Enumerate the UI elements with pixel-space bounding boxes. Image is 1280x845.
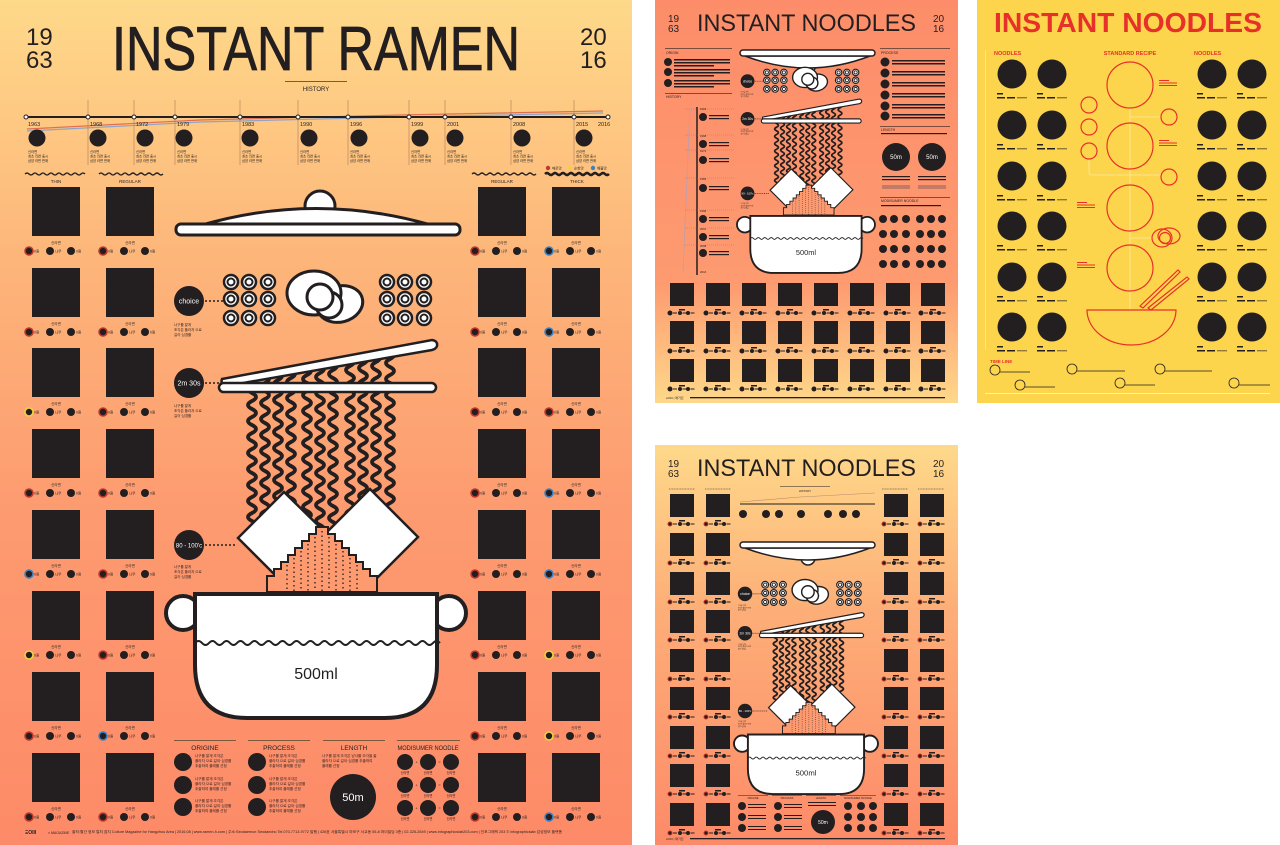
section: process: PROCESS [263,745,296,752]
icon: pot with water [166,594,466,718]
section: modisumer noodle: = [438,806,441,810]
step label: choice: 나구를 알게 [174,322,191,327]
yellow timeline [985,359,1270,394]
history timeline: 삼양 라면 판매 [447,158,467,163]
legend: 매운맛 [552,166,562,170]
icon: egg [287,271,367,327]
footer: 출처:월간 정보 컬처 잡지 Culture Magazine for Hangzhou Area | 2016.08 | www.ramen-h.com | 주소:Seodaemun Seodaecho Tel.070-7713-9772 발행 | 426호 서울특별시 마포구 서교동 55-8 마이빌딩 3층 | 02-325-2649 | www.infographicslab203.com | 인포그래픽 203 © infographicslab 감성정보 플랫폼 [72,829,563,834]
section: process: 추출하여 플레를 선정 [269,763,301,768]
column labels: thin / regular / regular / thick: REGULAR [119,179,142,184]
history timeline: 최초 라면 출시 [513,154,533,158]
yellow column headings: STANDARD RECIPE [1104,51,1157,57]
panel: thumbnail poster 3 (gradient) [655,445,958,845]
footer: ΞOIII [25,830,37,836]
history timeline: 1996 [350,122,362,128]
year end [580,24,607,74]
thumb title: 19 [668,14,680,25]
history timeline: 신라면 [242,149,251,154]
history timeline: 신라면 [300,149,309,154]
panel: thumbnail poster 1 (orange): 50m [926,155,938,161]
thumb3 title: 16 [933,469,945,480]
history timeline: 신라면 [90,149,99,154]
step label: 2m 30s: 조각은 플라자 으로 [174,408,202,413]
icon: chopsticks [219,340,437,392]
column labels: thin / regular / regular / thick [25,173,609,184]
step label: choice [174,286,223,337]
year end: 16 [580,47,607,74]
thumb footer: ΞOIII | 매거진 [666,395,684,400]
step label: 2m 30s: 2m 30s [178,380,201,388]
year start: 63 [26,47,53,74]
column labels: thin / regular / regular / thick: REGULAR [491,179,514,184]
section: process: 플라자 으로 길이·심경를 [269,781,306,786]
icon: pot lid [176,191,460,235]
section: modisumer noodle: + [415,760,418,764]
thumb3 title: 20 [933,459,945,470]
thumb3 column headers [669,488,944,490]
section: origine: 플라자 으로 길이·심경를 [195,803,232,808]
section: modisumer noodle: = [438,760,441,764]
icon grid: toppings right [380,275,431,325]
section: process: 추출하여 플레를 선정 [269,786,301,791]
history timeline: 1999 [411,122,423,128]
thumb3 bottom sections: ΞOIII | 매거진 [666,836,684,841]
history timeline: 1972 [136,122,148,128]
thumb3 lid [740,542,875,565]
section: origine: 플라자 으로 길이·심경를 [195,781,232,786]
section: modisumer noodle: = [438,782,441,788]
history timeline: 2015 [576,122,588,128]
step label: 80-100c [174,530,237,579]
history timeline: 삼양 라면 판매 [136,158,156,163]
thumb vertical timeline: 2001 [700,227,707,231]
thumb3 title: INSTANT NOODLES [697,455,916,482]
title: INSTANT RAMEN [112,15,520,84]
history timeline: 삼양 라면 판매 [576,158,596,163]
step label: choice: 길이·심경를 [174,332,192,337]
thumb vertical timeline: 1968 [700,134,707,138]
thumb3 bottom sections: PROCESS [781,796,794,800]
column labels: thin / regular / regular / thick: THIN [51,179,61,184]
history timeline: 신라면 [350,149,359,154]
history timeline: 2016 [598,122,610,128]
thumb title: 20 [933,14,945,25]
step label: 2m 30s: 길이·심경를 [174,413,192,418]
section: origine: 추출하여 플레를 선정 [195,808,227,813]
panel: main poster [0,0,632,845]
history timeline: 삼양 라면 판매 [513,158,533,163]
icon: pot with water: 500ml [294,666,338,683]
thumb3 history [739,486,875,518]
yellow timeline: TIME LINE [990,359,1012,364]
section: process: 나구를 알게 조각은 [269,753,298,758]
section: modisumer noodle: 신라면 [447,770,455,775]
section: origine: 나구를 알게 조각은 [195,798,224,803]
panel: thumbnail poster 3 (gradient): 50m [818,820,828,826]
history timeline: 최초 라면 출시 [350,154,370,158]
yellow noodle circles left [997,60,1067,352]
section: origine: 추출하여 플레를 선정 [195,763,227,768]
step label: 80-100c: 조각은 플라자 으로 [174,569,202,574]
history timeline: 최초 라면 출시 [177,154,197,158]
recipe diagram [1077,62,1189,345]
thumb3 bottom sections: MODISUMER NOODLE [844,796,872,800]
section: origine: 나구를 알게 조각은 [195,753,224,758]
section: process: 나구를 알게 조각은 [269,798,298,803]
section: length: 나구를 알게 조각은 낟사를 조각을 출 [322,753,377,758]
history timeline: 2008 [513,122,525,128]
history timeline: 삼양 라면 판매 [177,158,197,163]
step label: choice: 조각은 플라자 으로 [174,327,202,332]
history timeline: 신라면 [28,149,37,154]
section: origine [174,740,236,816]
thumb title: INSTANT NOODLES [697,10,916,37]
thumb illustration [737,67,875,273]
footer [25,829,563,836]
thumb vertical timeline [683,107,735,275]
section: modisumer noodle: 신라면 [424,793,432,798]
history timeline: 1963 [28,122,40,128]
icon: seasoning packets [238,489,418,585]
thumb inverted lid [740,50,875,74]
section: modisumer noodle [397,740,460,821]
thumb3 title: 19 [668,459,680,470]
history timeline: 삼양 라면 판매 [242,158,262,163]
section: process: 추출하여 플레를 선정 [269,808,301,813]
yellow noodle circles right [1197,60,1267,352]
history timeline: 최초 라면 출시 [300,154,320,158]
history timeline: 최초 라면 출시 [576,154,596,158]
history timeline: 신라면 [411,149,420,154]
section: modisumer noodle: + [415,806,418,810]
section: process [248,740,310,816]
section: process: 나구를 알게 조각은 [269,776,298,781]
yellow column headings: NOODLES [994,51,1022,57]
thumb vertical timeline: 2016 [700,270,707,274]
section: length: LENGTH [341,745,367,752]
section: modisumer noodle: 신라면 [424,770,432,775]
thumb vertical timeline: 1983 [700,177,707,181]
thumb3 bottom sections: LENGTH [816,796,826,800]
thumb3 cards right [882,494,944,835]
thumb origin list: HISTORY [666,95,682,99]
legend: 해물맛 [597,166,607,170]
thumb vertical timeline: 2008 [700,244,707,248]
thumb vertical timeline: 1972 [700,149,707,153]
section: modisumer noodle: + [415,782,418,788]
history timeline: 삼양 라면 판매 [300,158,320,163]
history timeline: 신라면 [177,149,186,154]
history timeline: 1990 [300,122,312,128]
step label: choice: choice [179,298,199,306]
section: modisumer noodle: 신라면 [401,816,409,821]
legend: 순한맛 [574,166,584,170]
thumb title: 16 [933,24,945,35]
history timeline: 최초 라면 출시 [28,154,48,158]
thumb title: 63 [668,24,680,35]
section: modisumer noodle: 신라면 [424,816,432,821]
panel: thumbnail poster 1 (orange): 50m [890,155,902,161]
thumb3 bottom sections [666,795,945,841]
history timeline: 신라면 [447,149,456,154]
history timeline: 1968 [90,122,102,128]
history timeline: 삼양 라면 판매 [90,158,110,163]
history timeline: 최초 라면 출시 [242,154,262,158]
column labels: thin / regular / regular / thick: THICK [570,179,584,184]
thumb origin list: ORIGIN [666,51,679,55]
step label: 2m 30s [174,368,220,418]
year start: 19 [26,24,53,51]
history heading: HISTORY [303,87,329,93]
yellow column headings [994,51,1222,57]
illustration: cooking steps [166,271,466,718]
section: modisumer noodle: MODISUMER NOODLE [398,745,458,752]
section: length [322,740,385,820]
section: modisumer noodle: 신라면 [401,793,409,798]
year start [26,24,53,74]
history timeline: 삼양 라면 판매 [350,158,370,163]
section: modisumer noodle: 신라면 [447,793,455,798]
section: origine: 나구를 알게 조각은 [195,776,224,781]
thumb3 history: HISTORY [799,489,811,493]
year end: 20 [580,24,607,51]
step label: 80-100c: 길이·심경를 [174,574,192,579]
history timeline: 신라면 [576,149,585,154]
noodle cards: right columns [471,187,601,821]
icon: boiling steam pyramid [267,527,377,592]
step label: 2m 30s: 나구를 알게 [174,403,191,408]
thumb process list [880,48,950,171]
history timeline: 2001 [447,122,459,128]
thumb process list: LENGTH [881,128,896,132]
thumb vertical timeline: 1963 [700,107,707,111]
section: origine: 플라자 으로 길이·심경를 [195,758,232,763]
history timeline: 최초 라면 출시 [136,154,156,158]
section: origine: 추출하여 플레를 선정 [195,786,227,791]
history timeline: 1983 [242,122,254,128]
history timeline: 최초 라면 출시 [447,154,467,158]
history timeline: 최초 라면 출시 [90,154,110,158]
thumb3 title: 63 [668,469,680,480]
thumb process list: PROCESS [881,51,899,55]
history timeline [24,100,610,165]
section: process: 플라자 으로 길이·심경를 [269,803,306,808]
step label: 80-100c: 나구를 알게 [174,564,191,569]
step label: 80-100c: 80 - 100'c [176,544,202,550]
history timeline: 삼양 라면 판매 [411,158,431,163]
yellow title: INSTANT NOODLES [994,7,1262,38]
icon grid: toppings left [224,275,275,325]
section: modisumer noodle: 신라면 [401,770,409,775]
thumb3 cards left [668,494,730,835]
thumb3 bottom sections: ORIGINE [748,796,759,800]
panel: thumbnail poster 1 (orange) [655,0,958,403]
legend [546,166,607,170]
section: modisumer noodle: 신라면 [447,816,455,821]
thumb origin list [664,48,732,99]
section: length: 플라자 으로 길이·심경를 추출하여 [322,758,372,763]
history timeline: 최초 라면 출시 [411,154,431,158]
panel: thumbnail poster 1 (orange): MODISUMER NOODLE [881,199,919,203]
history timeline: 1979 [177,122,189,128]
yellow column headings: NOODLES [1194,51,1222,57]
thumb vertical timeline: 1996 [700,209,707,213]
thumb3 illustration [734,579,878,794]
thumb card grid [668,283,946,391]
section: length: 플레를 선정 [322,763,340,768]
section: length: 50m [342,792,364,804]
footer: × MAGAZINE [48,831,70,835]
history timeline: 삼양 라면 판매 [28,158,48,163]
noodle cards: left columns [25,187,155,821]
icon: noodles [248,351,394,561]
panel: thumbnail poster 2 (yellow) [977,0,1280,403]
history timeline: 신라면 [136,149,145,154]
section: process: 플라자 으로 길이·심경를 [269,758,306,763]
section: origine: ORIGINE [191,745,219,752]
history heading [285,81,347,93]
history timeline: 신라면 [513,149,522,154]
